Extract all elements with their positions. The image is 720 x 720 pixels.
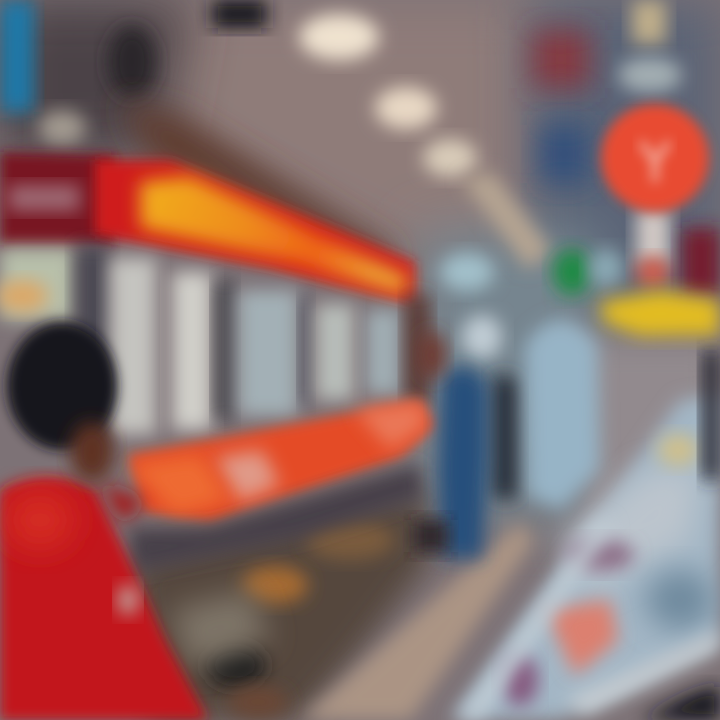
- shop windows: [0, 245, 430, 445]
- ceiling lights: [299, 14, 552, 270]
- floor: [300, 522, 535, 720]
- orange counter: [128, 400, 436, 522]
- top left dark and blue shapes: [0, 0, 400, 265]
- customer in blue: [414, 315, 520, 558]
- lower floor and shelves: [130, 490, 430, 720]
- display case: [450, 350, 720, 720]
- foreground person in red: [0, 322, 288, 720]
- dark counter edge: [128, 464, 422, 572]
- light blue column: [525, 320, 600, 510]
- right signage: [440, 0, 720, 336]
- storefront sign: [0, 152, 415, 305]
